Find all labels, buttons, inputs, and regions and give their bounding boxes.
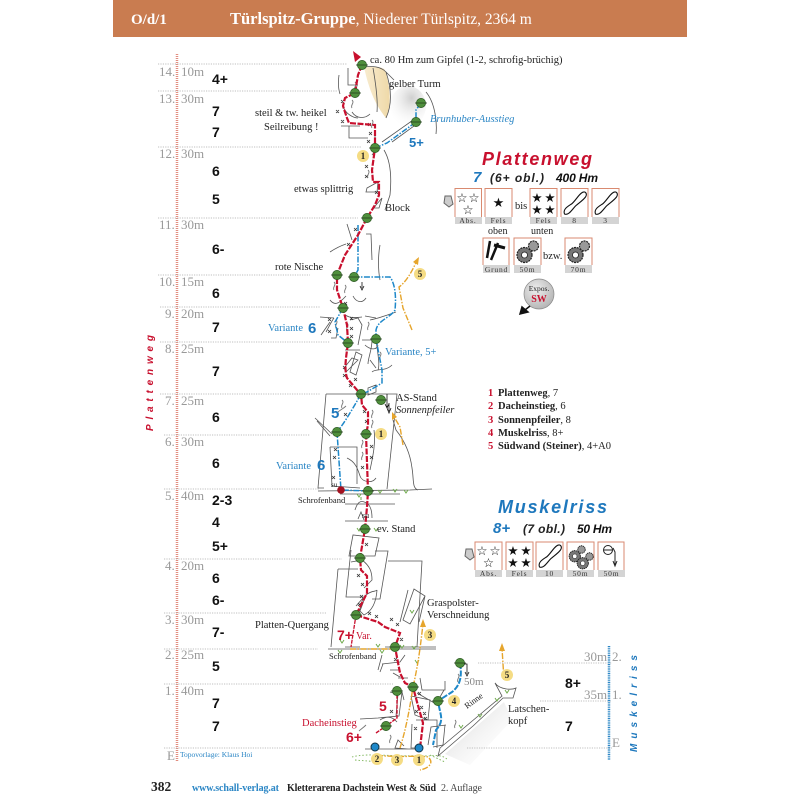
route annotations: ca. 80 Hm zum Gipfel (1-2, schrofig-brüchig) [370,55,563,66]
variant labels: Variante [268,323,303,334]
pitch scale: Plattenweg: 11. [159,217,175,232]
grade column: 7 [212,319,220,335]
route annotations: su [362,511,369,520]
exposure compass [520,279,554,314]
route annotations: Latschen- [508,704,550,715]
grade and gear icons: 10 [545,569,554,578]
grade and gear icons row 1: Abs. [459,216,477,225]
route legend: 5 [488,441,493,452]
pitch scale: Plattenweg: 30m [181,146,204,161]
route annotations: su [331,481,338,489]
pitch scale: Plattenweg: 8. [165,341,175,356]
route annotations: AS-Stand [396,393,438,404]
icon: nut [444,196,453,207]
grade and gear icons: ★ [520,555,532,570]
footer: Kletterarena Dachstein West & Süd [287,783,436,794]
route number markers: 2 [375,754,380,764]
grade and gear icons row 1: ★ [493,196,504,211]
grade and gear icons [475,542,625,578]
pitch scale: Muskelriss: 35m [584,687,607,702]
route annotations: Block [385,203,411,214]
variant labels: 6+ [346,729,362,745]
pitch scale: Muskelriss: 8+ [565,675,581,691]
pitch scale: Plattenweg: 2. [165,647,175,662]
grade and gear icons row 1: 3 [603,216,608,225]
route name: Plattenweg [482,149,592,169]
route legend: 1 [488,388,493,399]
grade column: 4 [212,514,220,530]
grade and gear icons row 1: 8 [572,216,577,225]
route number markers: 1 [361,151,366,161]
grade and gear icons row 1: unten [531,226,553,237]
info panel: Plattenweg [444,149,619,314]
pitch scale: Plattenweg: 14. [159,64,175,79]
variant labels: 5+ [409,135,424,150]
exposure compass: Expos. [529,284,549,293]
pitch scale: Plattenweg: 20m [181,306,204,321]
route legend: , 8+ [547,428,563,439]
route annotations: Seilreibung ! [264,122,319,133]
pitch scale: Plattenweg: 12. [159,146,175,161]
grade column: 7 [212,695,220,711]
grade and gear icons row 1: bis [515,201,527,212]
grade and gear icons row 1: ★ [544,190,556,205]
grade and gear icons: ☆ [489,543,501,558]
variant labels: Dacheinstieg [302,718,358,729]
variant labels: Variante, 5+ [385,347,436,358]
pitch scale: Muskelriss: E [612,735,620,750]
grade column: 4+ [212,71,228,87]
header bar [113,0,687,37]
variant labels: 5 [331,405,339,422]
gear icons row 2: 70m [571,265,586,274]
pitch scale: Plattenweg: 30m [181,612,204,627]
pitch scale: Muskelriss [467,646,640,760]
pitch scale: Plattenweg: 10. [159,274,175,289]
rock drawing [315,66,516,765]
route number markers: 4 [452,696,457,706]
route facts [473,169,598,186]
pitch scale: Plattenweg: 30m [181,434,204,449]
pitch scale: Plattenweg: 9. [165,306,175,321]
route 2-3 Orange climbing lines [350,257,505,770]
route number markers: 3 [395,755,400,765]
footer: 382 [151,779,172,794]
route facts: 50 Hm [577,522,612,536]
pitch scale: Plattenweg: 3. [165,612,175,627]
grade column: 2-3 [212,492,232,508]
section code: O/d/1 [131,12,167,28]
grade and gear icons row 1: ☆ [468,190,480,205]
gear icons row 2 [483,238,592,274]
route number markers: 3 [428,630,433,640]
pitch scale: Plattenweg: 5. [165,488,175,503]
route legend: Südwand (Steiner) [498,441,582,452]
pitch scale: Plattenweg: 25m [181,341,204,356]
route annotations: kopf [508,716,528,727]
route annotations: Schrofenband [298,495,346,505]
pitch scale: Plattenweg: 30m [181,217,204,232]
route legend: Sonnenpfeiler [498,415,561,426]
route legend: 3 [488,415,493,426]
pitch scale: Plattenweg: 30m [181,91,204,106]
vertical label: Muskelriss: Muskelriss [629,655,640,752]
pitch scale: Plattenweg: 25m [181,393,204,408]
grade and gear icons: Fels [512,569,527,578]
pitch scale: Muskelriss: 30m [584,649,607,664]
grade and gear icons row 1: ★ [544,202,556,217]
route facts: 7 [473,169,482,186]
route facts: (7 obl.) [523,522,565,536]
route annotations: Graspolster- [427,598,479,609]
vertical label: Plattenweg: Plattenweg [145,335,156,431]
grade column: 6- [212,241,225,257]
variant labels [268,114,514,745]
variant labels: 5 [379,698,387,714]
pitch scale: Plattenweg: 4. [165,558,175,573]
route facts: (6+ obl.) [490,171,544,185]
route annotations: gelber Turm [389,79,441,90]
pitch scale: Plattenweg: 15m [181,274,204,289]
grade and gear icons: ★ [520,543,532,558]
grade and gear icons: ☆ [476,543,488,558]
route annotations: ev. Stand [377,524,416,535]
grade and gear icons: 50m [573,569,588,578]
route annotations: Sonnenpfeiler [396,405,455,416]
route annotations: 50m [464,676,484,688]
route legend: Muskelriss [498,428,547,439]
variant labels: 6 [308,320,316,337]
footer: www.schall-verlag.at [192,783,280,794]
route annotations: Schrofenband [329,651,377,661]
icon: nut [465,549,474,560]
grade and gear icons row 1: ★ [531,190,543,205]
pitch scale: Plattenweg: 6. [165,434,175,449]
route annotations: etwas splittrig [294,184,354,195]
grade and gear icons row 1: ★ [531,202,543,217]
route name: Muskelriss [498,497,607,517]
grade column [212,71,232,734]
route facts: 400 Hm [555,171,598,185]
variant labels: Variante [276,461,311,472]
route facts: 8+ [493,520,510,537]
grade column: 6 [212,285,220,301]
grade and gear icons row 1: Fels [491,216,506,225]
route annotations: rote Nische [275,262,323,273]
grade column: 6- [212,592,225,608]
pitch scale: Plattenweg: E [167,748,175,763]
pitch scale: Plattenweg: 40m [181,488,204,503]
grade and gear icons: ★ [507,543,519,558]
grade and gear icons: ☆ [483,555,494,570]
grade column: 7 [212,103,220,119]
route legend: Dacheinstieg [498,401,556,412]
pitch scale: Plattenweg: 40m [181,683,204,698]
route annotations: Rinne [462,690,485,711]
grade and gear icons row 1 [455,188,619,237]
info panel: Muskelriss [465,497,625,578]
route 1: Plattenweg red line [337,51,423,748]
pitch scale: Plattenweg [158,54,393,763]
route number markers: 1 [417,755,422,765]
route number markers [357,150,513,766]
route legend: 4 [488,428,494,439]
title: Türlspitz-Gruppe, Niederer Türlspitz, 2364 m [230,9,532,28]
route number markers: 1 [379,429,384,439]
route annotations: Verschneidung [427,610,490,621]
gear icons row 2: Grund [485,265,508,274]
grade and gear icons row 1: ☆ [456,190,468,205]
grade column: 6 [212,570,220,586]
grade and gear icons: ★ [507,555,519,570]
grade column: 7- [212,624,225,640]
grade column: 6 [212,409,220,425]
route legend: , 4+A0 [582,441,611,452]
grade and gear icons: 50m [604,569,619,578]
variant labels: Brunhuber-Ausstieg [430,114,514,125]
variant labels: 6 [317,457,325,474]
route legend: Plattenweg [498,388,548,399]
pitch scale: Plattenweg: 13. [159,91,175,106]
footer [151,779,483,794]
grade column: 5+ [212,538,228,554]
pitch scale: Plattenweg: 1. [165,683,175,698]
route legend: , 8 [560,415,571,426]
route annotations [255,55,563,727]
grade column: 7 [212,124,220,140]
route legend: , 7 [548,388,558,399]
grade column: 5 [212,191,220,207]
pitch scale: Plattenweg: 25m [181,647,204,662]
pitch scale: Plattenweg: 7. [165,393,175,408]
pitch scale: Muskelriss: 7 [565,718,573,734]
grade and gear icons row 1: oben [488,226,507,237]
route number markers: 5 [418,269,423,279]
route annotations: steil & tw. heikel [255,108,327,119]
route facts [493,520,612,537]
footer: 2. Auflage [441,783,483,794]
exposure compass: SW [531,294,547,305]
gear icons row 2: bzw. [543,251,562,262]
grade column: 6 [212,163,220,179]
gear icons row 2: 50m [520,265,535,274]
pitch scale: Muskelriss: 1. [612,687,622,702]
grade and gear icons: Abs. [480,569,497,578]
pitch scale: Plattenweg: 20m [181,558,204,573]
topo credit: Topovorlage: Klaus Hoi [180,750,252,759]
route annotations: Platten-Quergang [255,620,330,631]
pitch scale: Muskelriss: 2. [612,649,622,664]
belay stations [331,60,469,752]
route legend [488,388,611,452]
pitch scale: Plattenweg: 10m [181,64,204,79]
grade column: 7 [212,718,220,734]
grade column: 7 [212,363,220,379]
variant labels: Var. [356,631,372,642]
grade and gear icons row 1: Fels [536,216,551,225]
route number markers: 5 [505,670,510,680]
grade and gear icons row 1: ☆ [462,202,474,217]
grade column: 5 [212,658,220,674]
grade column: 6 [212,455,220,471]
route: blue variants [335,103,461,745]
route legend: , 6 [555,401,566,412]
variant labels: 7+ [337,627,353,643]
route legend: 2 [488,401,493,412]
